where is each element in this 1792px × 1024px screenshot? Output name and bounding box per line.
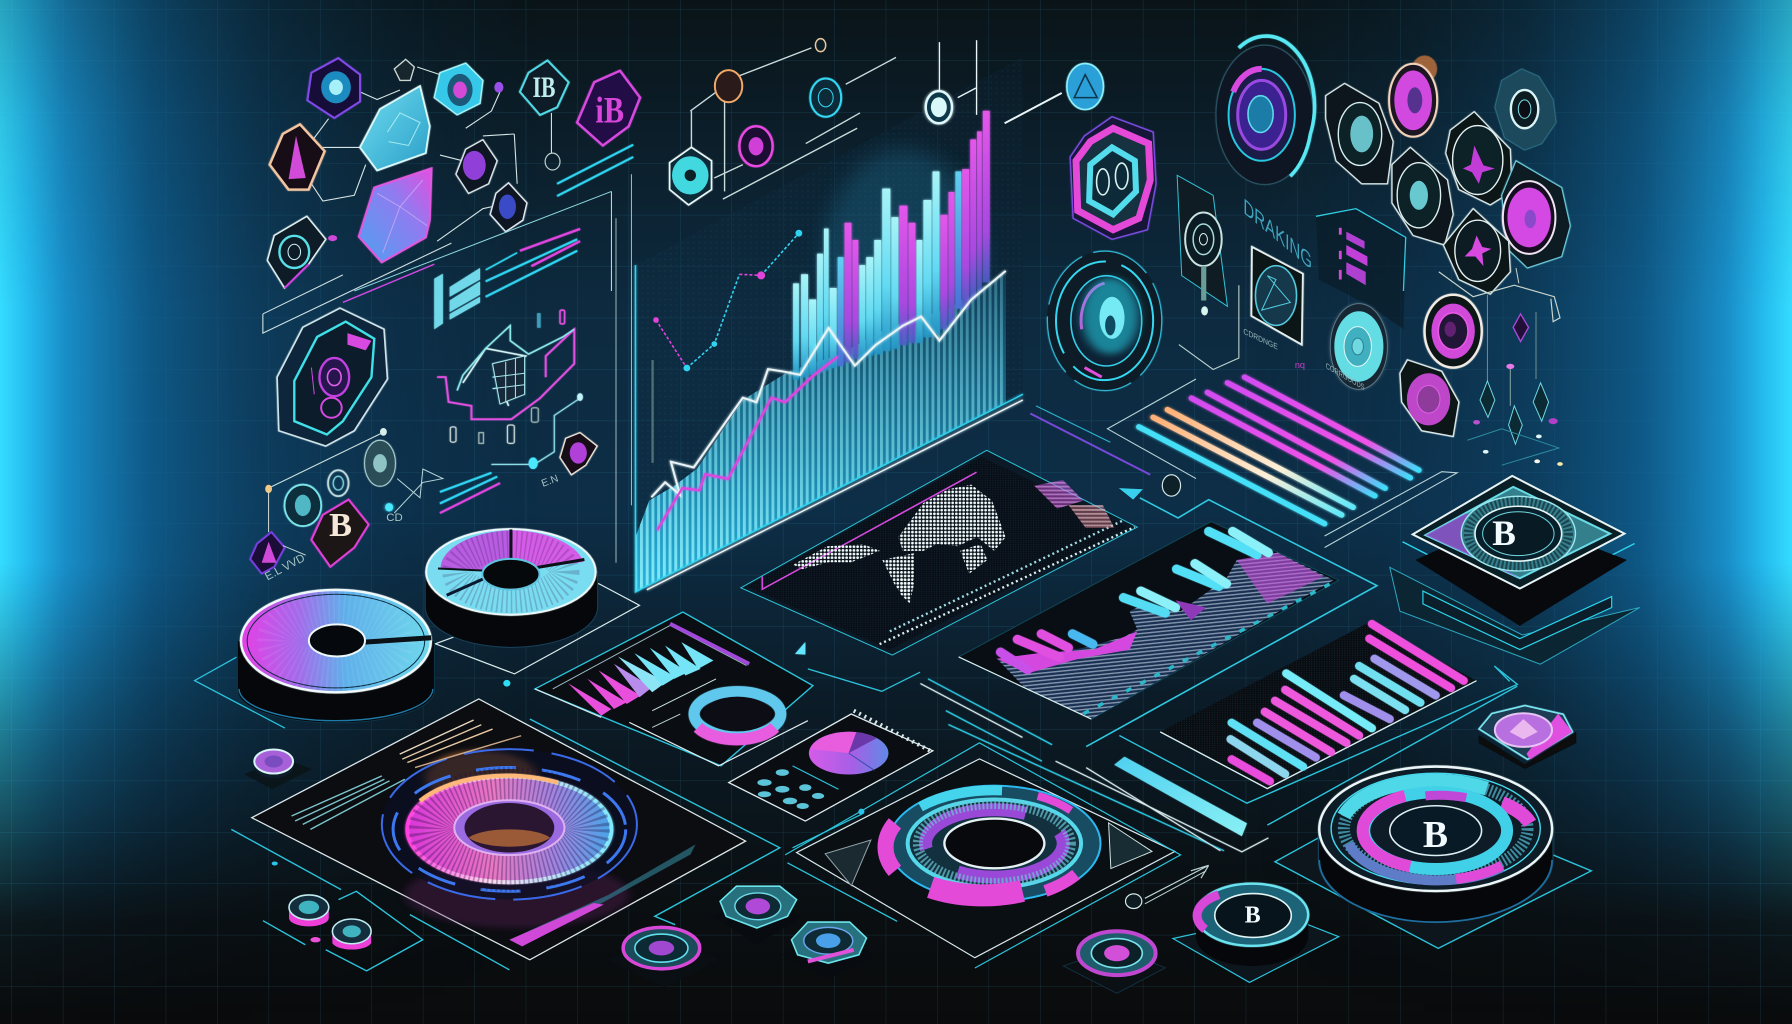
panel: cone and donut dashboard	[535, 612, 813, 766]
hex labels: IB	[533, 72, 555, 104]
axis labels	[651, 360, 654, 463]
frame lines	[263, 174, 631, 563]
token: pill 1	[289, 895, 329, 926]
title word: DRAKING	[1243, 194, 1312, 275]
text stripes	[292, 720, 521, 829]
hex: teal IB	[520, 60, 569, 115]
map heat spots	[1034, 480, 1083, 509]
right labels	[1243, 194, 1365, 392]
network nodes above chart	[670, 39, 896, 205]
disc 1 chart	[195, 590, 434, 728]
chart: big cyan progress bar	[920, 679, 1268, 852]
octagon: neon badge	[1070, 117, 1156, 239]
node: magenta	[739, 126, 773, 166]
ring: cyan glow emblem	[1047, 251, 1162, 391]
neon bars	[1139, 377, 1419, 524]
hex labels: B	[329, 506, 352, 544]
node: cyan hex	[670, 147, 711, 205]
token: pill 2	[332, 919, 371, 950]
panel: wave chart and bars	[959, 498, 1377, 747]
bitcoin letter: large coin: B	[1423, 814, 1448, 856]
shield: cyan	[360, 86, 430, 170]
shield: purple	[359, 168, 431, 262]
node: blue triangle	[1067, 64, 1103, 109]
hex labels: E.N	[540, 473, 560, 490]
pendants	[1467, 295, 1563, 466]
octagon badge	[277, 308, 387, 446]
emblem core	[1082, 278, 1139, 354]
diamond marker	[1513, 314, 1529, 342]
pie chart	[809, 732, 888, 775]
icon: small grey ring	[394, 59, 414, 80]
token: small purple	[244, 749, 312, 789]
price lines	[651, 271, 1006, 530]
connector to magenta hex	[491, 393, 597, 475]
right labels: CDRDNGE	[1243, 326, 1278, 352]
hex labels: iB	[595, 89, 624, 130]
left hexagon cluster	[250, 58, 640, 574]
token: small hex right	[1479, 706, 1576, 768]
node: glow white	[926, 91, 952, 123]
token: bottom magenta	[608, 927, 719, 988]
frame: pill tokens	[263, 891, 423, 971]
frame around neon bars	[1030, 379, 1457, 547]
warm glow	[425, 751, 537, 804]
circle: magenta ring	[1425, 295, 1482, 368]
token: hex top	[713, 886, 803, 945]
small triangle decorations	[1109, 823, 1152, 869]
hook connector	[1179, 285, 1239, 369]
chart frame	[635, 265, 1023, 592]
coin: tiny magenta	[1063, 931, 1165, 993]
circle: magenta lower	[1400, 360, 1459, 436]
hex: magenta disc	[1502, 161, 1570, 268]
cones	[568, 642, 713, 716]
hex: magenta star	[1446, 112, 1512, 205]
table dots	[757, 769, 824, 809]
small triangle and token	[1119, 488, 1143, 500]
panel: bar chart	[1119, 622, 1517, 825]
connector hook	[1439, 272, 1560, 322]
small tokens left	[244, 642, 920, 988]
hex: purple IB	[577, 71, 640, 145]
panel: segmented ring	[785, 743, 1181, 968]
hex: wheel	[1326, 83, 1393, 184]
glowing nodes top center	[926, 40, 1103, 123]
right labels: nq	[1295, 360, 1305, 370]
circle: magenta with glow	[1389, 56, 1437, 137]
dotted trend line	[653, 230, 802, 371]
coin: small B	[1173, 884, 1339, 982]
hex labels: E.L VVD	[263, 552, 307, 583]
main ring	[407, 777, 611, 882]
node: ring top	[815, 39, 826, 52]
donut: small	[694, 692, 781, 739]
bottom-left icon cluster	[250, 428, 500, 574]
bitcoin letter: diamond: B	[1492, 513, 1516, 553]
outer blue ring	[382, 749, 637, 900]
small table icon	[434, 229, 580, 329]
right labels: CORRGOODS	[1326, 361, 1365, 392]
ring: large purple target	[1216, 36, 1314, 185]
small pendant	[545, 153, 560, 170]
cyan spark	[795, 642, 805, 654]
panel: line and bar chart wall	[635, 57, 1023, 592]
panel: pie dashboard	[729, 711, 933, 821]
hex labels: CD	[386, 512, 403, 524]
connector lines	[309, 67, 551, 241]
stripe area under the lines	[635, 272, 1006, 592]
hex: purple starburst	[307, 58, 360, 118]
token: hex lower	[782, 922, 874, 980]
wave fill	[997, 553, 1334, 719]
hex: small magenta pendant	[250, 532, 285, 574]
donut: bitcoin coin large	[1275, 767, 1591, 948]
hex: cyan ring lower	[267, 216, 326, 288]
magenta and cyan stripes	[509, 844, 696, 946]
node: orange	[715, 70, 742, 102]
disc 2 chart	[425, 529, 639, 674]
hex: cyan badge	[434, 63, 483, 115]
hex labels	[263, 72, 624, 583]
hex: sun	[1392, 147, 1453, 245]
panel: map	[741, 450, 1137, 655]
hex: orange triangle	[270, 124, 325, 190]
square emblem panel	[1251, 247, 1303, 345]
gear	[1495, 69, 1556, 150]
map continents	[793, 480, 1114, 603]
cyan dash lines	[557, 145, 633, 196]
hex: purple center	[456, 140, 497, 193]
blueprint diagram	[437, 310, 574, 443]
badge: bitcoin diamond stack	[1390, 476, 1640, 664]
vertical bars	[793, 111, 990, 379]
donut: glowing ring panel	[231, 699, 780, 970]
dot purple	[494, 82, 503, 93]
right hexagon cluster	[1030, 36, 1570, 547]
node: cyan ring	[810, 78, 841, 117]
hex: star lower	[1443, 209, 1510, 294]
tool panel	[1177, 175, 1227, 315]
bitcoin letter: small coin: B	[1245, 902, 1261, 928]
small arrow	[1125, 865, 1209, 909]
short neon bars	[440, 473, 500, 513]
wave bars	[1001, 531, 1268, 670]
hex: B badge	[311, 500, 369, 567]
text panel with bars	[1316, 209, 1406, 329]
hex: blue center	[490, 183, 527, 232]
circle: cyan disc	[1330, 304, 1387, 389]
